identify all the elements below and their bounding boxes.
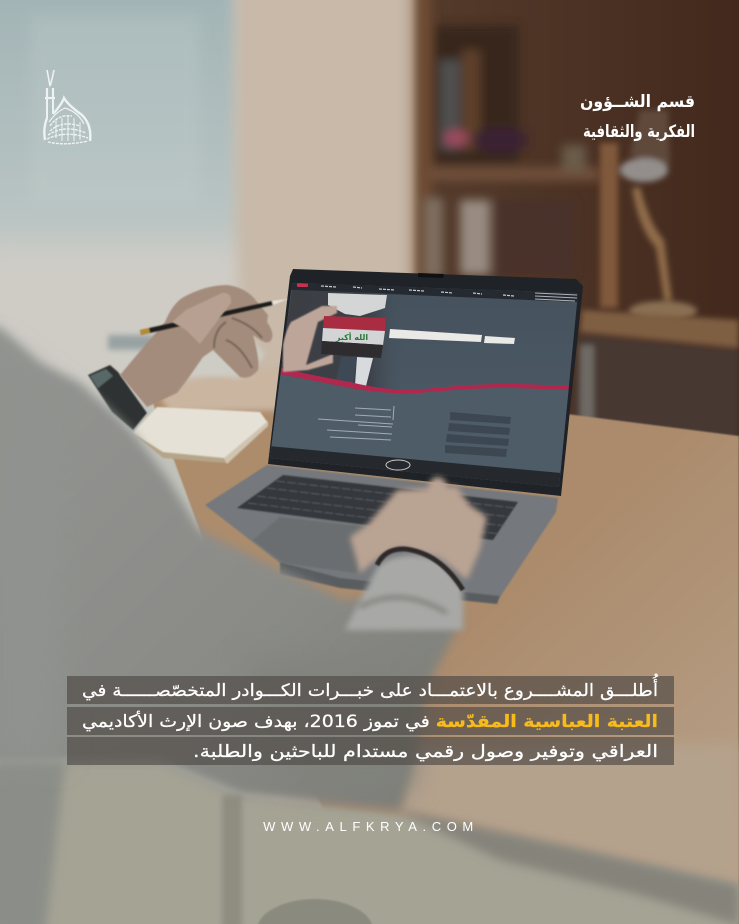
caption bars bbox=[67, 676, 674, 765]
header text: قسم الشــؤون bbox=[580, 92, 695, 112]
lower panel bbox=[268, 372, 570, 490]
header text bbox=[580, 92, 695, 142]
red badge bbox=[297, 283, 308, 287]
caption text bbox=[82, 674, 658, 762]
caption text: أُطلـــق المشــــروع بالاعتمـــاد على خبـــرات الكـــوادر المتخصّصــــــة في bbox=[82, 674, 658, 701]
header text: الفكرية والثقافية bbox=[583, 122, 695, 142]
website url: WWW.ALFKRYA.COM bbox=[263, 819, 479, 834]
site header bar bbox=[291, 283, 578, 302]
footer logo bbox=[386, 460, 410, 470]
notebook bbox=[133, 407, 268, 464]
back notebook blur bbox=[105, 328, 265, 378]
search bar bbox=[389, 329, 482, 342]
site logo bbox=[535, 293, 577, 301]
hero photo bbox=[282, 290, 394, 388]
logo: calligraphic dome bbox=[44, 70, 90, 144]
laptop base bbox=[205, 465, 558, 604]
sleeve cuff bbox=[345, 555, 463, 630]
wrist watch bbox=[88, 365, 147, 430]
left hand holding pen bbox=[120, 285, 288, 407]
nav labels bbox=[321, 286, 514, 296]
blurred foreground bottom bbox=[0, 762, 739, 924]
typing hand bbox=[350, 477, 487, 580]
bookshelf bbox=[418, 0, 600, 290]
desk lamp bbox=[600, 110, 697, 321]
footer bar bbox=[268, 446, 561, 490]
pencil bbox=[140, 299, 288, 335]
tiny text block lines bbox=[318, 406, 394, 440]
caption text: العراقي وتوفير وصول رقمي مستدام للباحثين والطلبة. bbox=[193, 742, 658, 762]
camera notch bbox=[418, 273, 444, 278]
person body and arm bbox=[0, 327, 462, 810]
dropdown rows bbox=[445, 412, 511, 457]
caption text: العتبة العباسية المقدّسة في تموز 2016، بهدف صون الإرث الأكاديمي bbox=[82, 711, 658, 732]
trackpad bbox=[253, 517, 367, 573]
bracelet bbox=[377, 549, 463, 590]
flag: الله أكبر bbox=[335, 332, 368, 342]
key rows bbox=[248, 481, 515, 534]
screen flag and held hand bbox=[283, 306, 386, 372]
back shelf surface bbox=[572, 310, 739, 445]
red wave bbox=[280, 368, 569, 394]
finger gaps bbox=[214, 318, 262, 368]
desk surface bbox=[150, 365, 739, 924]
laptop lid and screen bbox=[268, 269, 583, 496]
keyboard bbox=[237, 475, 518, 540]
